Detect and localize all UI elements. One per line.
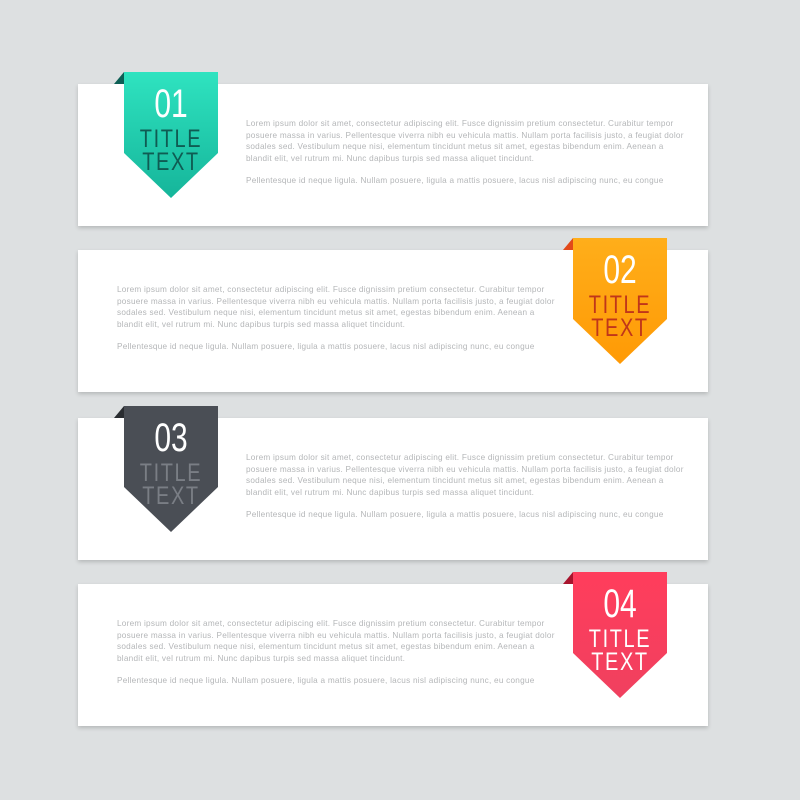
text block 4: Lorem ipsum dolor sit amet, consectetur adipiscing elit. Fusce dignissim pretium consectetur. Curabitur tempor: [117, 619, 544, 628]
text block 2: posuere massa in varius. Pellentesque viverra nibh eu vehicula mattis. Nullam porta facilisis justo, a feugiat dolor: [117, 297, 555, 306]
ribbon 03: 03: [154, 416, 188, 460]
ribbon 03: [114, 406, 218, 532]
panel 3: [78, 418, 708, 560]
text block 1: [246, 119, 684, 185]
text block 4: blandit elit, vel rutrum mi. Nunc dapibus turpis sed massa aliquet tincidunt.: [117, 654, 405, 663]
text block 3: blandit elit, vel rutrum mi. Nunc dapibus turpis sed massa aliquet tincidunt.: [246, 488, 534, 497]
ribbon 04: TITLE: [589, 625, 651, 653]
ribbon 01: TITLE: [140, 125, 202, 153]
text block 1: blandit elit, vel rutrum mi. Nunc dapibus turpis sed massa aliquet tincidunt.: [246, 154, 534, 163]
panel 2: [78, 250, 708, 392]
ribbon 02: TEXT: [591, 314, 649, 342]
ribbon 02: 02: [603, 248, 637, 292]
ribbon 02: TITLE: [589, 291, 651, 319]
text block 4: Pellentesque id neque ligula. Nullam posuere, ligula a mattis posuere, lacus nisl adipiscing nunc, eu congue: [117, 676, 535, 685]
text block 1: Lorem ipsum dolor sit amet, consectetur adipiscing elit. Fusce dignissim pretium consectetur. Curabitur tempor: [246, 119, 674, 128]
ribbon 04: [563, 572, 667, 698]
text block 2: sodales sed. Vestibulum neque nisi, elementum tincidunt metus sit amet, egestas bibendum enim. Aenean a: [117, 308, 535, 317]
text block 1: sodales sed. Vestibulum neque nisi, elementum tincidunt metus sit amet, egestas bibendum enim. Aenean a: [246, 142, 664, 151]
text block 2: Pellentesque id neque ligula. Nullam posuere, ligula a mattis posuere, lacus nisl adipiscing nunc, eu congue: [117, 342, 535, 351]
ribbon 04: 04: [603, 582, 637, 626]
text block 3: sodales sed. Vestibulum neque nisi, elementum tincidunt metus sit amet, egestas bibendum enim. Aenean a: [246, 476, 664, 485]
text block 2: blandit elit, vel rutrum mi. Nunc dapibus turpis sed massa aliquet tincidunt.: [117, 320, 405, 329]
panel 1: [78, 84, 708, 226]
ribbon 02: [563, 238, 667, 364]
ribbon 03: TITLE: [140, 459, 202, 487]
ribbon 04: TEXT: [591, 648, 649, 676]
text block 4: sodales sed. Vestibulum neque nisi, elementum tincidunt metus sit amet, egestas bibendum enim. Aenean a: [117, 642, 535, 651]
text block 2: Lorem ipsum dolor sit amet, consectetur adipiscing elit. Fusce dignissim pretium consectetur. Curabitur tempor: [117, 285, 544, 294]
text block 3: posuere massa in varius. Pellentesque viverra nibh eu vehicula mattis. Nullam porta facilisis justo, a feugiat dolor: [246, 465, 684, 474]
text block 3: Pellentesque id neque ligula. Nullam posuere, ligula a mattis posuere, lacus nisl adipiscing nunc, eu congue: [246, 510, 664, 519]
text block 2: [117, 285, 555, 351]
ribbon 01: 01: [154, 82, 188, 126]
panel 4: [78, 584, 708, 726]
ribbon 01: TEXT: [142, 148, 200, 176]
text block 1: posuere massa in varius. Pellentesque viverra nibh eu vehicula mattis. Nullam porta facilisis justo, a feugiat dolor: [246, 131, 684, 140]
text block 4: posuere massa in varius. Pellentesque viverra nibh eu vehicula mattis. Nullam porta facilisis justo, a feugiat dolor: [117, 631, 555, 640]
text block 3: [246, 453, 684, 519]
text block 1: Pellentesque id neque ligula. Nullam posuere, ligula a mattis posuere, lacus nisl adipiscing nunc, eu congue: [246, 176, 664, 185]
ribbon 03: TEXT: [142, 482, 200, 510]
text block 3: Lorem ipsum dolor sit amet, consectetur adipiscing elit. Fusce dignissim pretium consectetur. Curabitur tempor: [246, 453, 674, 462]
ribbon 01: [114, 72, 218, 198]
text block 4: [117, 619, 555, 685]
